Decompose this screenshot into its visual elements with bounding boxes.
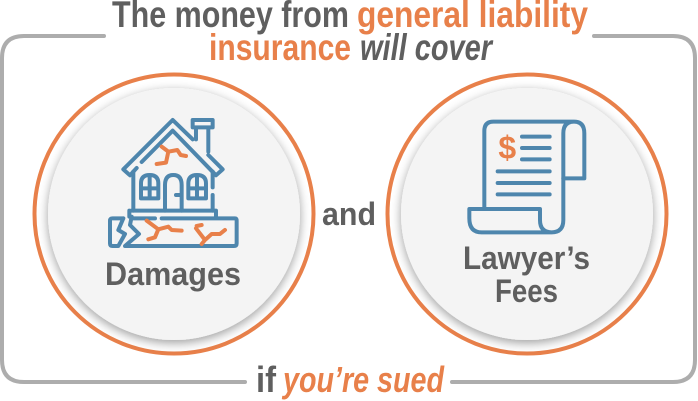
connector word: and: [322, 196, 376, 232]
title: will cover: [360, 27, 494, 68]
icon: invoice scroll: [469, 122, 584, 232]
label: lawyer's fees: Fees: [495, 273, 558, 309]
label: damages: Damages: [105, 256, 241, 292]
label: lawyer's fees: Lawyer’s: [463, 240, 590, 276]
label: lawyer's fees: [463, 240, 590, 309]
panel: lawyer's fees: [388, 74, 666, 354]
icon: dollar sign: $: [498, 129, 516, 165]
title: insurance: [209, 27, 351, 68]
title: [112, 0, 588, 68]
footer caption: if: [256, 359, 277, 400]
panel: damages: [34, 74, 314, 354]
icon: cracked house: [110, 120, 237, 246]
footer caption: you’re sued: [281, 359, 445, 400]
